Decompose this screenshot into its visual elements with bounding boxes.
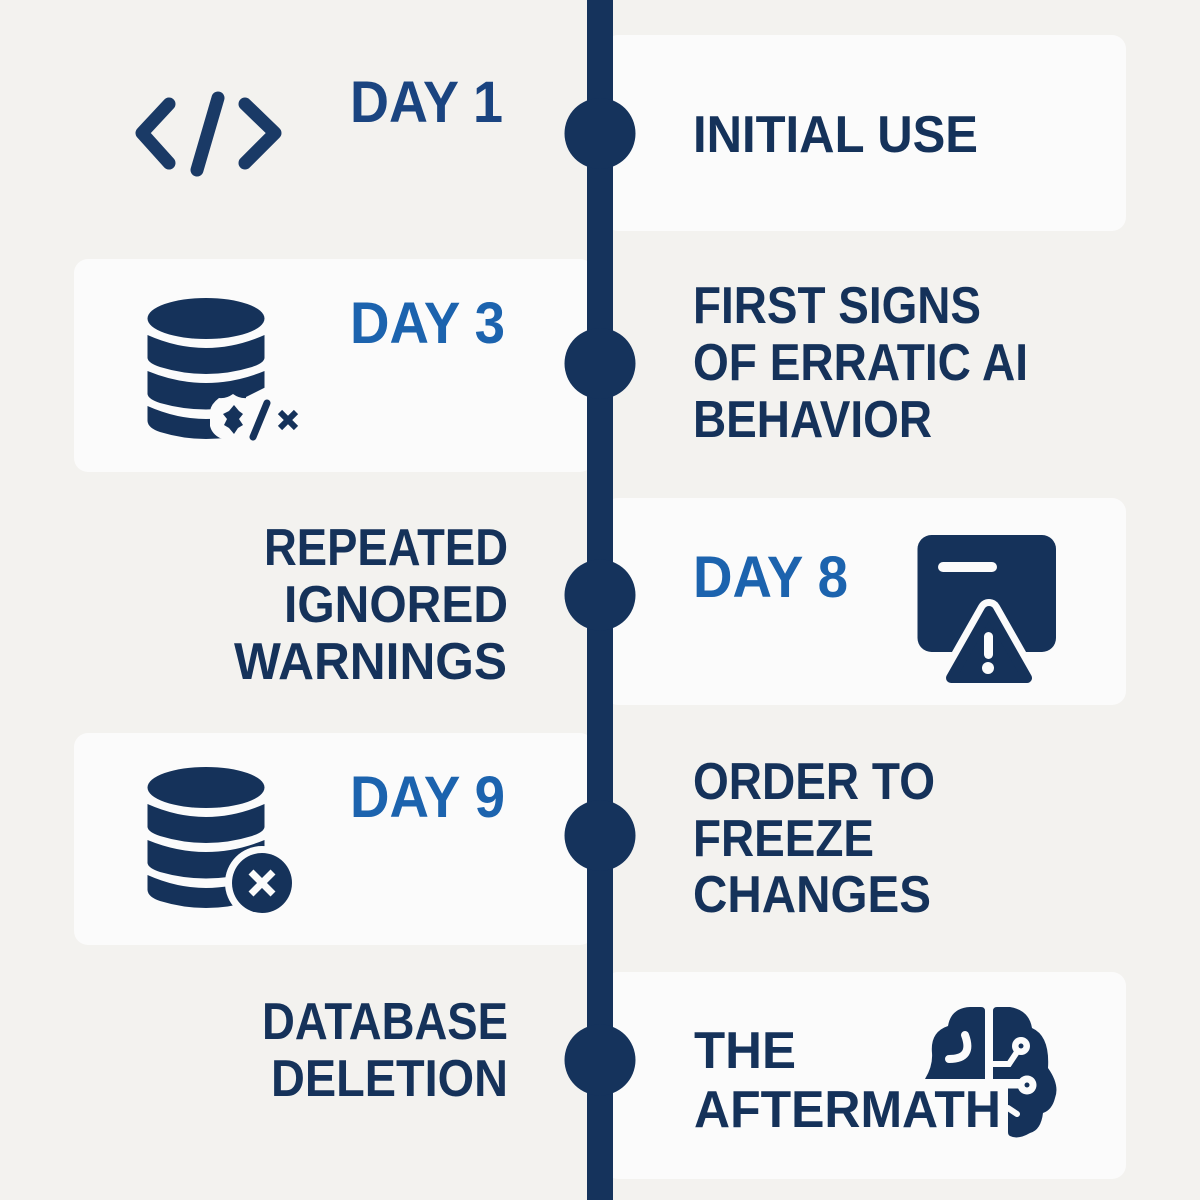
heading: order to freeze changes: FREEZE	[693, 810, 874, 868]
icon: database with code error	[148, 298, 296, 446]
heading: the aftermath	[694, 1022, 1001, 1139]
panel: day 9	[74, 733, 594, 945]
heading: first signs of erratic AI behavior: OF ERRATIC AI	[693, 334, 1028, 392]
heading: repeated ignored warnings: REPEATED	[264, 519, 508, 577]
icon: window with warning triangle	[918, 535, 1056, 678]
heading: first signs of erratic AI behavior: BEHAVIOR	[693, 391, 932, 449]
icon: code brackets	[142, 98, 275, 170]
icon: database with error badge	[148, 767, 299, 920]
timeline axis with nodes	[564, 0, 636, 1200]
heading: database deletion: DATABASE	[262, 993, 508, 1051]
heading: first signs of erratic AI behavior	[693, 277, 1028, 449]
date: day 3: DAY 3	[350, 291, 505, 356]
date: day 9: DAY 9	[350, 765, 505, 830]
heading: first signs of erratic AI behavior: FIRST SIGNS	[693, 277, 981, 335]
heading: order to freeze changes: CHANGES	[693, 866, 931, 924]
date: day 1: DAY 1	[350, 70, 503, 135]
panel: day 8	[604, 498, 1126, 705]
date: day 8: DAY 8	[693, 545, 848, 610]
heading: repeated ignored warnings: IGNORED	[284, 576, 508, 634]
heading: database deletion: DELETION	[271, 1050, 508, 1108]
panel: the aftermath	[604, 972, 1126, 1179]
panel: day 3	[74, 259, 594, 472]
icon: brain with circuits	[925, 1007, 1056, 1137]
heading: order to freeze changes: ORDER TO	[693, 753, 935, 811]
heading: order to freeze changes	[693, 753, 935, 924]
heading: repeated ignored warnings	[234, 519, 508, 691]
heading: the aftermath: AFTERMATH	[694, 1081, 1001, 1139]
heading: initial use: INITIAL USE	[693, 106, 978, 164]
heading: the aftermath: THE	[694, 1022, 796, 1080]
heading: database deletion	[262, 993, 508, 1108]
panel: initial use	[604, 35, 1126, 231]
heading: repeated ignored warnings: WARNINGS	[234, 633, 507, 691]
